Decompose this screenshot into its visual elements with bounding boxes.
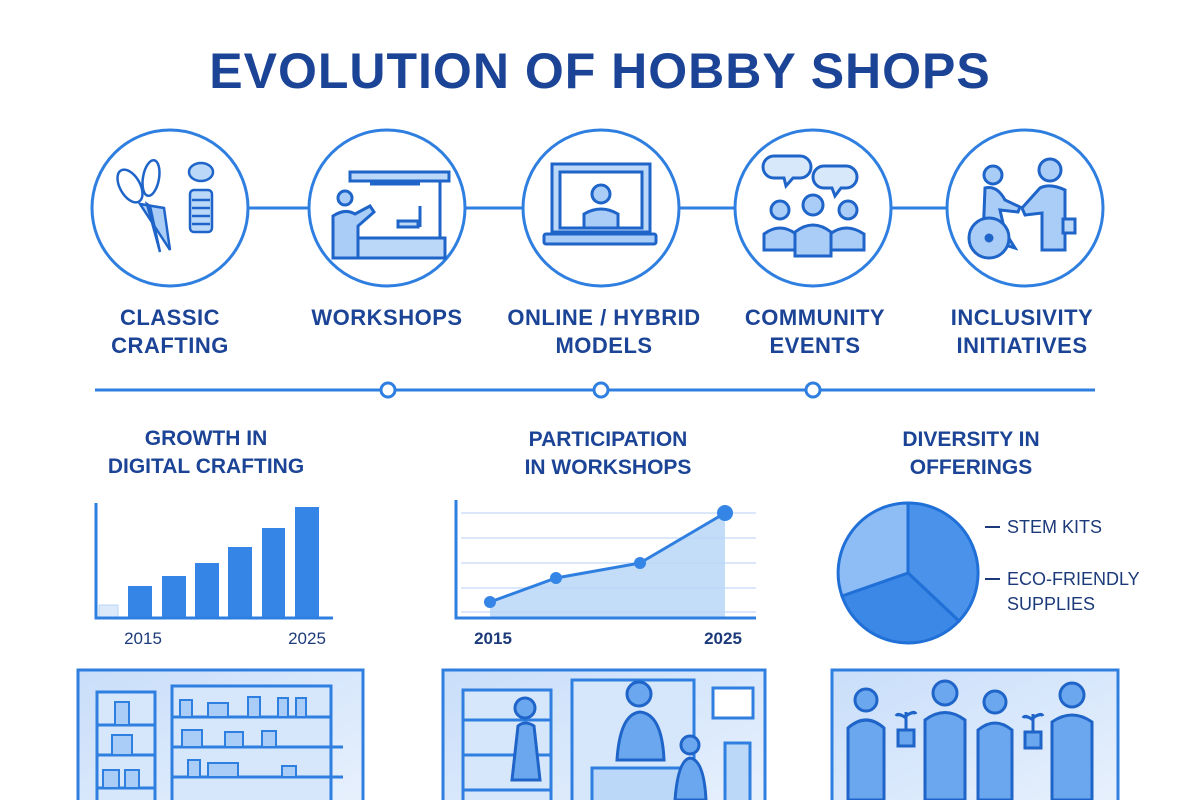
section headings: OFFERINGS (910, 456, 1032, 479)
bar chart (96, 503, 333, 648)
stage labels: WORKSHOPS (311, 305, 463, 330)
stage labels: INITIATIVES (956, 333, 1088, 358)
section headings: GROWTH IN (145, 427, 267, 450)
line chart (456, 500, 756, 648)
timeline (95, 383, 1095, 397)
icon: classic crafting (92, 130, 248, 286)
pie chart (838, 503, 978, 643)
section headings (108, 427, 1040, 479)
panel: people with plants (832, 670, 1118, 800)
icon: workshops (309, 130, 465, 286)
connector lines (248, 206, 947, 210)
icon: community events (735, 130, 891, 286)
stage labels: COMMUNITY (745, 305, 885, 330)
stage labels: ONLINE / HYBRID (507, 305, 701, 330)
section headings: PARTICIPATION (529, 428, 687, 451)
stage labels: INCLUSIVITY (951, 305, 1093, 330)
icon: inclusivity (947, 130, 1103, 286)
bar chart: 2015 (124, 629, 162, 648)
pie legend: SUPPLIES (1007, 594, 1095, 614)
pie legend: STEM KITS (1007, 517, 1102, 537)
section headings: IN WORKSHOPS (525, 456, 691, 479)
stage labels: MODELS (555, 333, 653, 358)
line chart: 2025 (704, 629, 742, 648)
panel: workshop scene (443, 670, 765, 800)
section headings: DIGITAL CRAFTING (108, 455, 304, 478)
icon: online / hybrid (523, 130, 679, 286)
pie legend (985, 517, 1140, 614)
stage labels (111, 305, 1093, 358)
panel: shop shelves (78, 670, 363, 800)
section headings: DIVERSITY IN (902, 428, 1040, 451)
pie legend: ECO-FRIENDLY (1007, 569, 1140, 589)
stage labels: EVENTS (769, 333, 861, 358)
line chart: 2015 (474, 629, 512, 648)
title: EVOLUTION OF HOBBY SHOPS (209, 43, 991, 99)
bar chart: 2025 (288, 629, 326, 648)
stage labels: CLASSIC (120, 305, 220, 330)
stage labels: CRAFTING (111, 333, 229, 358)
